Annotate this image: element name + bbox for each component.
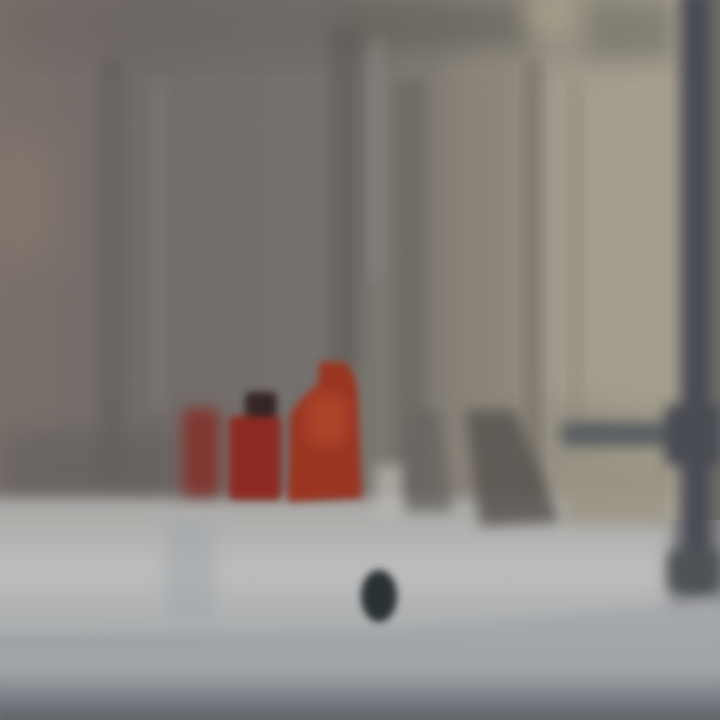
bottle: right bbox=[288, 362, 362, 502]
red bottles bbox=[182, 362, 362, 502]
bottle: left bbox=[182, 408, 220, 496]
faucet handle bbox=[560, 405, 720, 465]
wall background bbox=[0, 0, 720, 520]
dark base items behind the sink bbox=[405, 410, 670, 526]
counter ledge bbox=[0, 600, 720, 720]
black drain knob bbox=[361, 570, 397, 622]
vertical faucet pipe bbox=[668, 0, 720, 592]
bottle: middle bbox=[229, 392, 281, 500]
sink basin bbox=[0, 465, 670, 643]
